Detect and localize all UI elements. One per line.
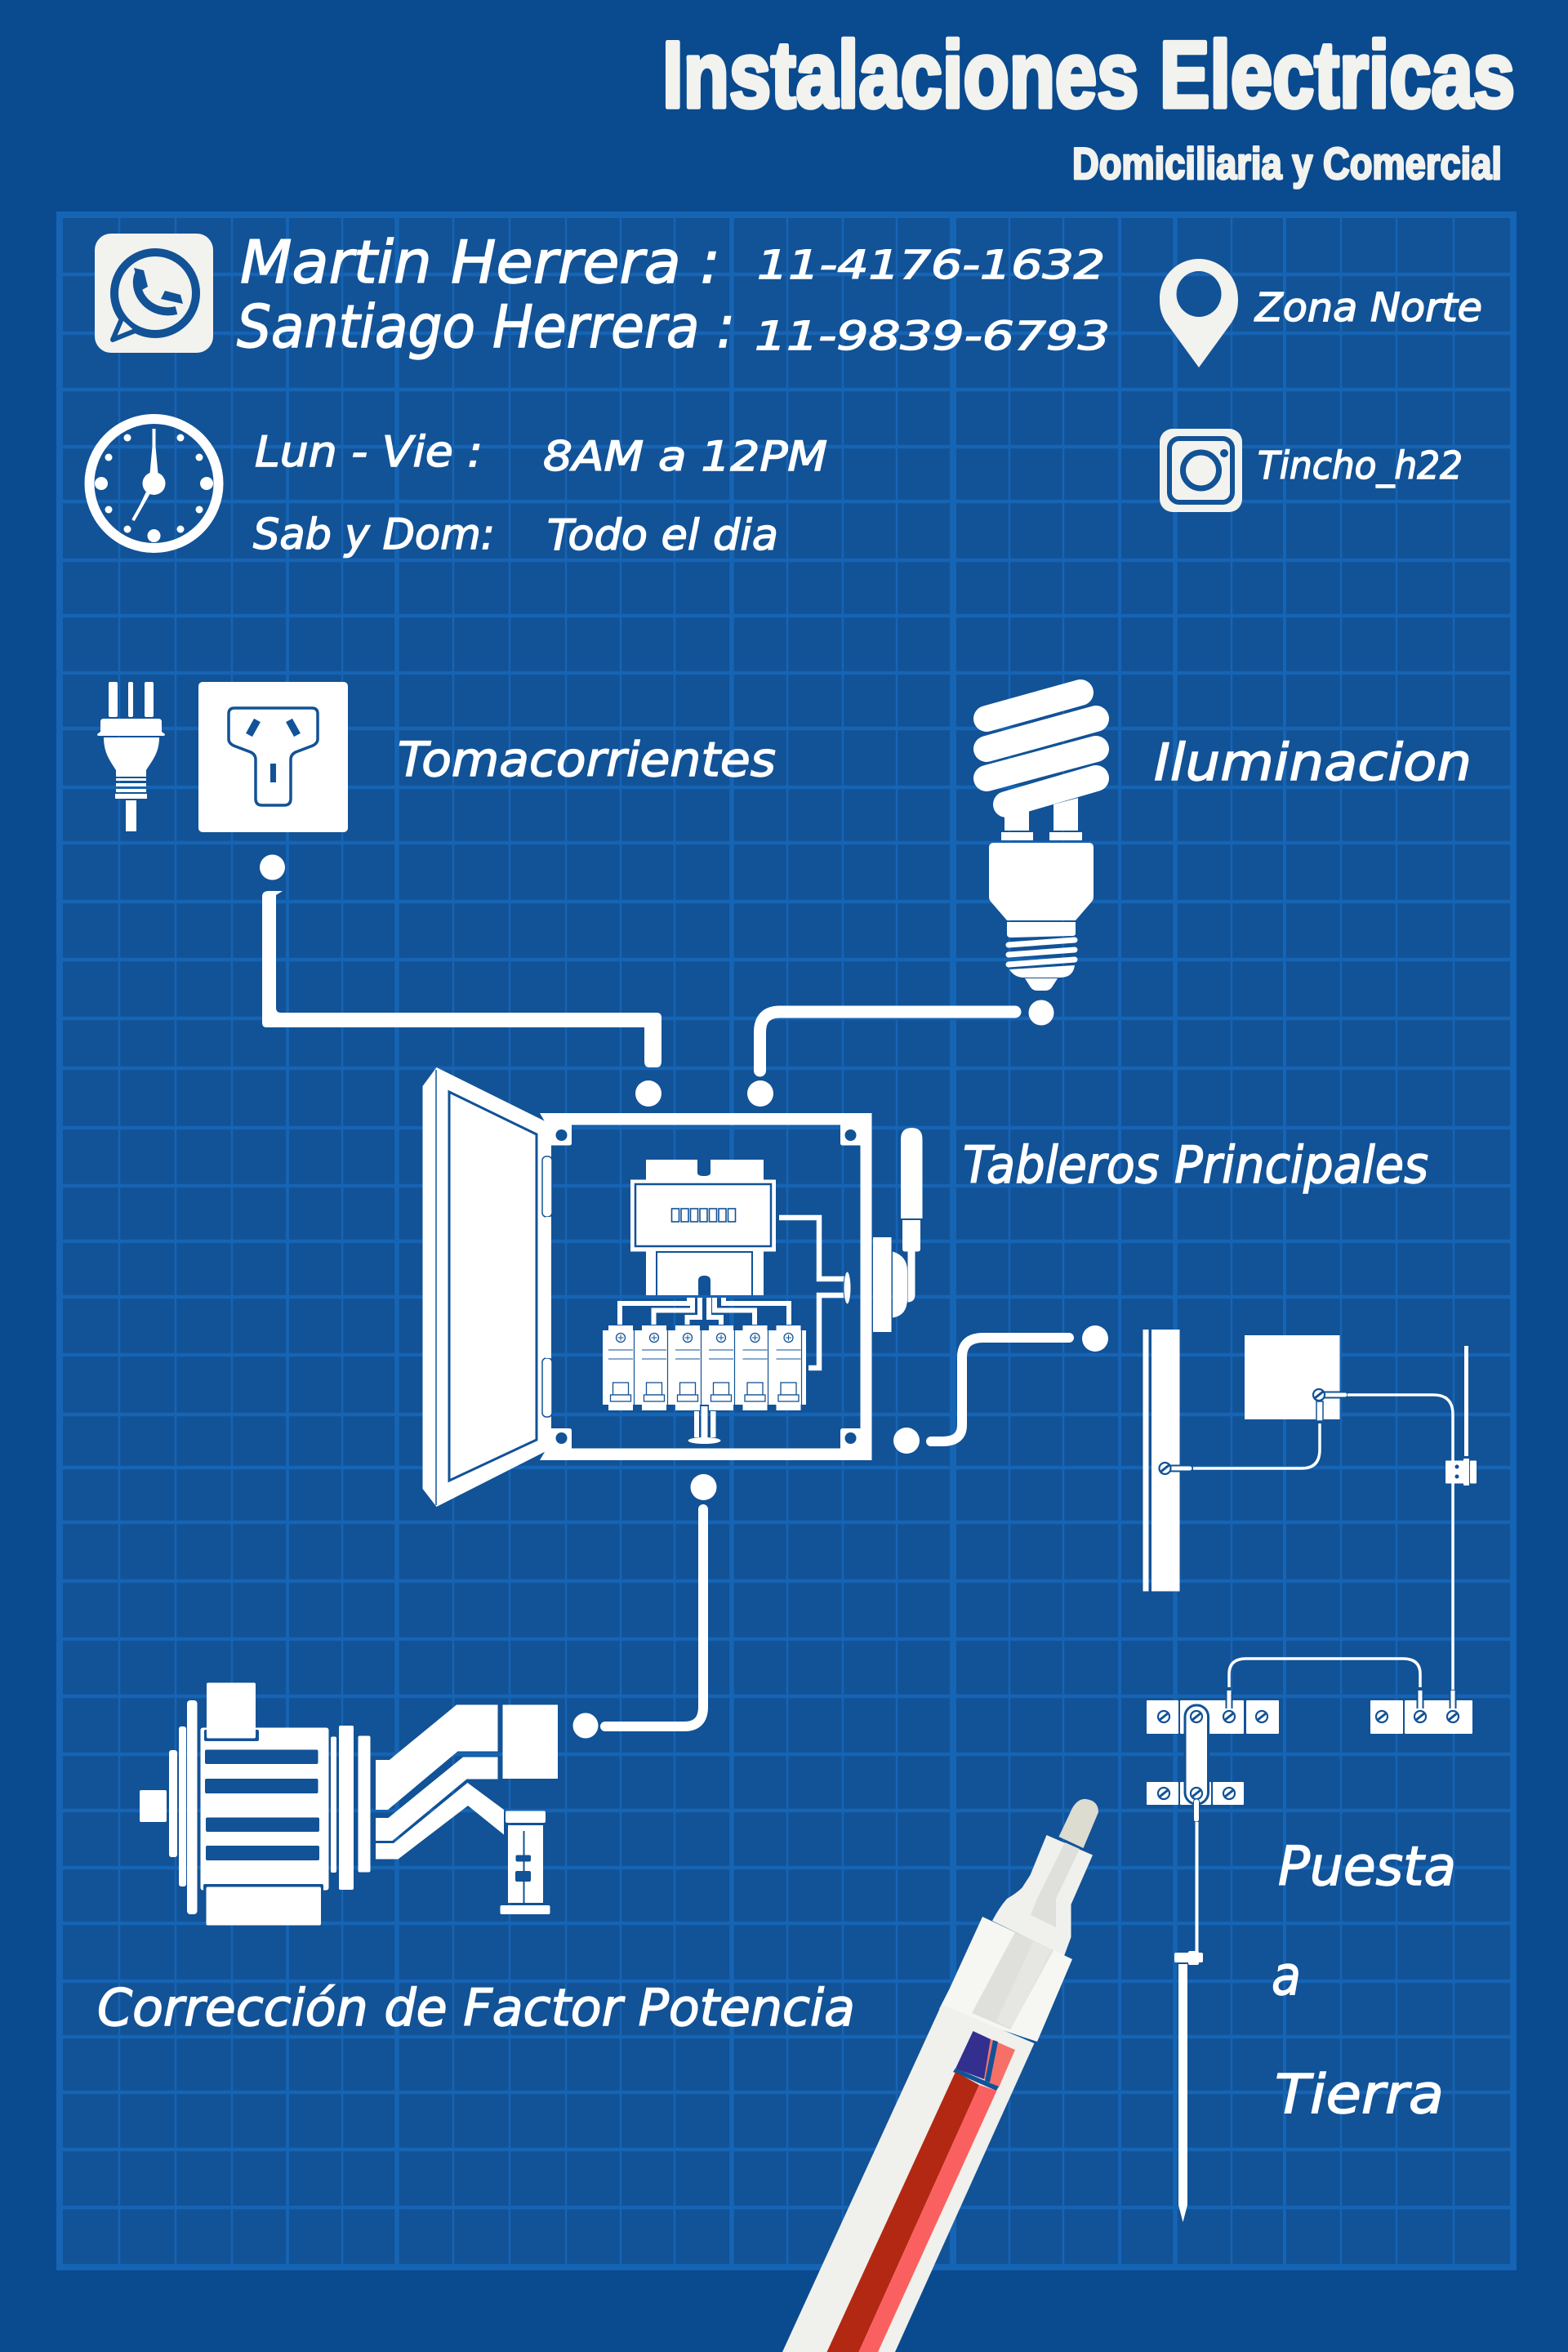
pen collar [939,1917,1072,2042]
building column [1143,1330,1179,1591]
link bar [1185,1705,1209,1804]
contact names and phones: Santiago Herrera : [237,292,735,361]
contact names and phones: 11-9839-6793 [755,314,1110,359]
bridge wire [1229,1659,1453,1708]
wire: column to box [1160,1401,1323,1474]
icon: plug [97,682,165,831]
label: puesta a tierra: a [1272,1944,1301,2007]
connector: bulb to panel [747,1000,1054,1107]
contact names and phones [237,228,1110,361]
opening hours: Lun - Vie : [255,428,483,477]
icon: motor capacitor unit [140,1682,558,1926]
right terminal block [1370,1700,1472,1734]
opening hours [253,428,827,560]
label: puesta a tierra: Puesta [1278,1835,1456,1898]
conduit gland [844,1272,851,1304]
wire: box to clamp [1313,1389,1453,1690]
terminal screws [1158,1711,1459,1799]
external switch [873,1128,923,1332]
wires from meter to breakers [620,1298,789,1325]
pen tip [1058,1799,1098,1848]
pen window [826,2031,1015,2352]
connector: socket to panel [260,854,662,1107]
instagram handle: Tincho_h22 [1258,443,1463,488]
label: tableros principales: Tableros Principales [963,1135,1428,1195]
electric meter [630,1160,776,1295]
capacitor stand [500,1811,550,1914]
side wire loop [779,1218,846,1368]
icon: clock [90,419,219,548]
icon: instagram [1160,429,1242,512]
panel box frame [540,1113,872,1460]
label: iluminacion: Iluminacion [1154,733,1472,792]
opening hours: Sab y Dom: [253,510,495,559]
left terminal block [1147,1700,1279,1805]
label: correccion de factor potencia: Corrección de Factor Potencia [97,1978,855,2038]
label: tomacorrientes: Tomacorrientes [398,732,776,787]
rod and clamp [1446,1346,1477,1486]
opening hours: Todo el dia [547,511,778,560]
illustration: marker pen [782,1799,1098,2352]
pen barrel [782,2004,1034,2352]
label: puesta a tierra: Tierra [1275,2063,1444,2126]
ground wire and electrode [1174,1799,1203,2222]
motor body [140,1682,371,1926]
electrical panel [423,1067,923,1507]
contact names and phones: 11-4176-1632 [757,243,1105,288]
grounding diagram [1143,1330,1477,2222]
location text: Zona Norte [1254,285,1482,331]
breakers [603,1325,806,1410]
bottom rods [688,1406,720,1444]
icon: location pin [1160,259,1238,368]
pipes [376,1705,558,1859]
label: puesta a tierra [1272,1835,1456,2126]
opening hours: 8AM a 12PM [543,433,827,480]
panel door [423,1067,546,1507]
contact names and phones: Martin Herrera : [240,228,720,296]
connector: panel to motor [573,1474,717,1738]
icon: whatsapp [95,234,213,353]
junction box [1245,1335,1339,1419]
pen nose cone [992,1835,1093,1956]
icon: light bulb [987,693,1096,991]
connector: panel to grounding [893,1325,1108,1454]
icon: wall socket [198,682,348,832]
